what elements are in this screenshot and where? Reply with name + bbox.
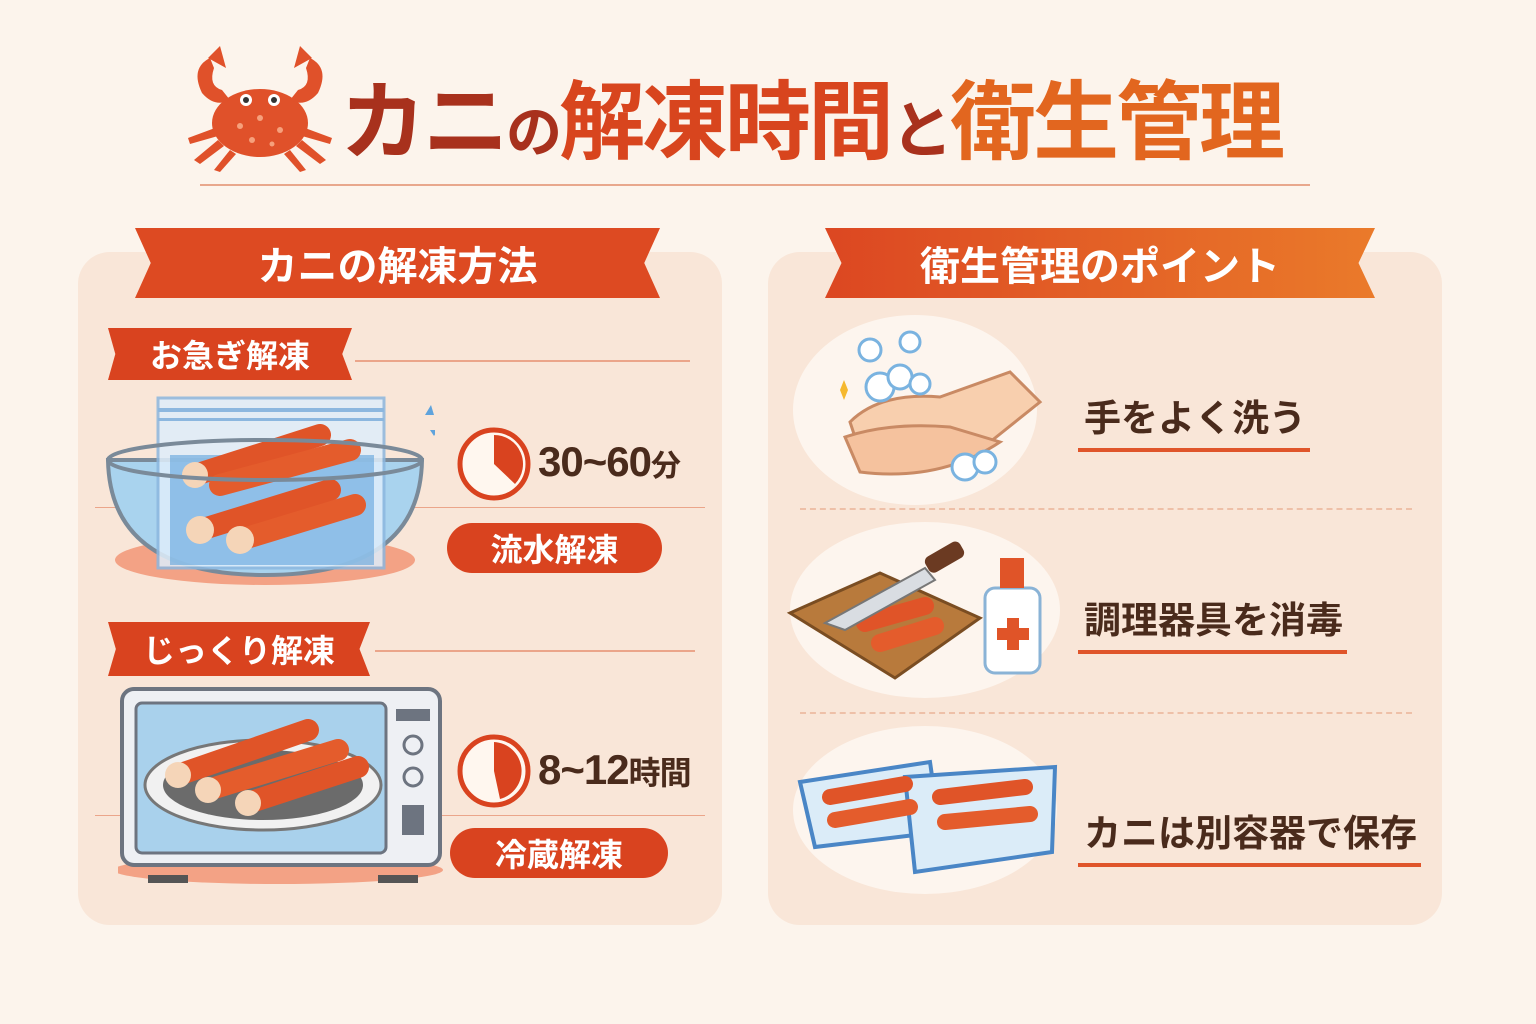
pill: fridge thaw: 冷蔵解凍 [495,837,623,873]
tag: slow thaw: じっくり解凍 [143,633,335,669]
pill: running water thaw [447,523,662,573]
tag: quick thaw [108,328,352,380]
text: 8~12時間: 8~12時間 [538,746,691,793]
illustration: bowl with crab legs in bag [106,396,435,585]
heading: thawing methods [135,228,660,298]
text: disinfect utensils [1078,590,1347,654]
panel: thawing methods [78,252,722,925]
icon: crab [188,46,332,172]
illustration: fridge/microwave with crab plate [118,687,443,884]
text: wash hands [1078,388,1310,452]
pill: running water thaw: 流水解凍 [490,532,618,568]
heading: hygiene points: 衛生管理のポイント [920,245,1280,289]
text: wash hands: 手をよく洗う [1084,398,1306,439]
text: 30~60分: 30~60分 [538,438,680,485]
pill: fridge thaw [450,828,668,878]
text: store crab separately: カニは別容器で保存 [1084,813,1417,854]
tag: quick thaw: お急ぎ解凍 [150,338,310,374]
heading: hygiene points [825,228,1375,298]
tag: slow thaw [108,622,370,676]
panel: hygiene points [768,252,1442,925]
title: カニの解凍時間と衛生管理 [340,75,1282,171]
icon: clock 30-60 [458,428,530,500]
heading: thawing methods: カニの解凍方法 [258,245,538,289]
icon: knife and spray [786,522,1060,698]
icon: clock 8-12 [458,734,530,808]
icon: washing hands [793,315,1042,505]
text: store crab separately [1078,803,1421,867]
icon: storage containers [793,726,1058,894]
text: disinfect utensils: 調理器具を消毒 [1084,600,1343,641]
